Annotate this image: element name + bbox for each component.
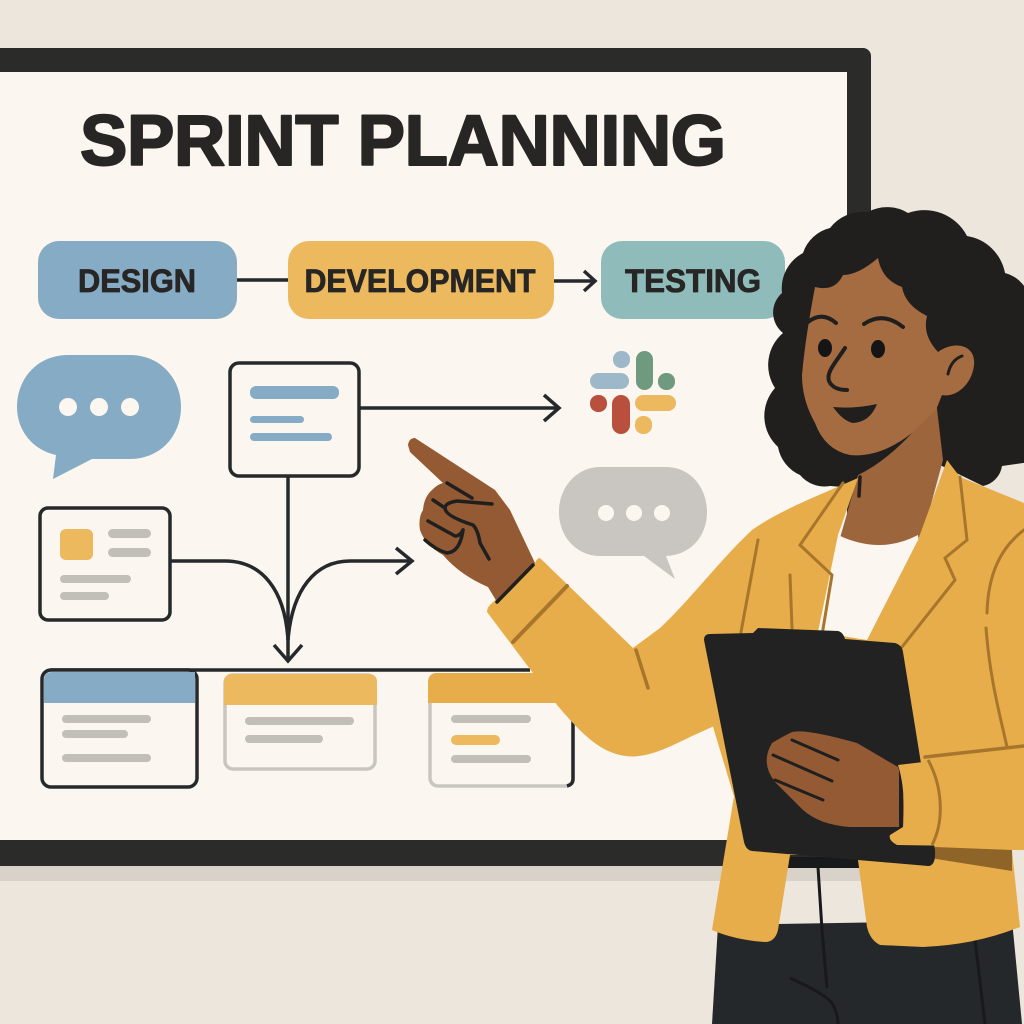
workflow pill: testing xyxy=(601,241,785,319)
blazer seams xyxy=(513,477,1024,757)
card: blue column xyxy=(42,670,197,787)
clipboard xyxy=(704,628,935,866)
horizontal board rail xyxy=(50,668,530,672)
holding hand xyxy=(767,731,904,827)
right sleeve and cuff xyxy=(890,750,1024,847)
eyes xyxy=(818,339,885,358)
arrow: note to slack xyxy=(359,395,559,421)
finger and cuff lines xyxy=(425,483,533,602)
yellow blazer body xyxy=(487,460,1024,947)
workflow pill: design: DESIGN xyxy=(78,263,196,299)
icon: four-colour chat logo xyxy=(590,351,676,434)
icon: blue speech bubble xyxy=(17,355,181,479)
workflow pill: development xyxy=(288,241,554,319)
neck crease xyxy=(859,477,860,496)
workflow pill: testing: TESTING xyxy=(625,263,761,299)
trousers xyxy=(712,857,1022,1024)
icon: grey speech bubble xyxy=(559,467,707,579)
card: task note xyxy=(230,363,359,476)
presenter xyxy=(408,207,1024,1024)
pointing hand xyxy=(408,438,535,602)
branching flow arrows xyxy=(170,476,412,661)
eyebrows and nose xyxy=(808,317,903,390)
card: profile item xyxy=(40,508,170,620)
workflow pill: design xyxy=(38,241,237,319)
connector: design to development xyxy=(237,278,288,282)
card: yellow column with tag xyxy=(428,673,573,786)
workflow pill: development: DEVELOPMENT xyxy=(304,263,536,299)
presentation board xyxy=(0,48,871,866)
title: SPRINT PLANNING xyxy=(80,102,726,181)
white blouse xyxy=(815,535,925,645)
face xyxy=(802,258,974,455)
smile xyxy=(833,404,877,423)
finger lines xyxy=(773,740,901,827)
card: yellow column xyxy=(224,674,377,769)
blazer shadow xyxy=(930,847,1012,871)
neck xyxy=(838,400,943,545)
ear line xyxy=(948,356,962,374)
arrow: development to testing xyxy=(554,271,595,291)
hair xyxy=(764,207,1024,490)
